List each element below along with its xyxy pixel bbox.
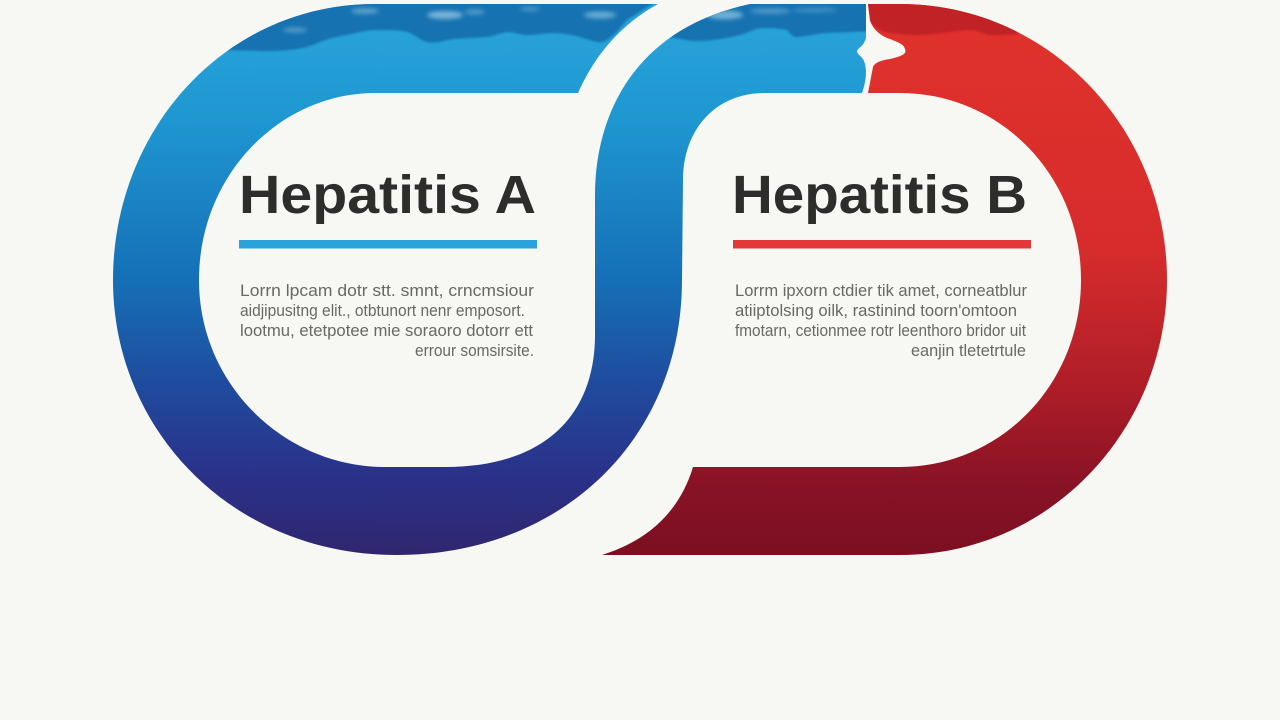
text block: Hepatitis B description: Lorrm ipxorn ctdier tik amet, corneatblur — [735, 282, 1027, 300]
text block: Hepatitis A description — [240, 282, 535, 360]
text block: Hepatitis A description: Lorrn lpcam dotr stt. smnt, crncmsiour — [240, 282, 535, 300]
text block: Hepatitis A description: lootmu, etetpotee mie soraoro dotorr ett — [240, 322, 533, 340]
heading: Hepatitis B: Hepatitis B — [732, 165, 1027, 225]
darker wave along red top — [866, 0, 1018, 35]
text block: Hepatitis B description: fmotarn, cetionmee rotr leenthoro bridor uit — [735, 322, 1026, 340]
text block: Hepatitis A description: aidjipusitng elit., otbtunort nenr emposort. — [240, 302, 525, 320]
text block: Hepatitis B description: eanjin tletetrtule — [911, 342, 1026, 360]
text block: Hepatitis A description: errour somsirsite. — [415, 342, 534, 360]
underline: Hepatitis A — [239, 240, 537, 248]
heading: Hepatitis A: Hepatitis A — [239, 165, 536, 225]
water wave texture along blue top — [225, 0, 875, 51]
text block: Hepatitis B description — [735, 282, 1027, 360]
panel: Hepatitis B red loop — [590, 0, 1180, 570]
text block: Hepatitis B description: atiiptolsing oilk, rastinind toorn'omtoon — [735, 302, 1017, 320]
underline: Hepatitis B — [733, 240, 1031, 248]
infographic: hepatitis A and B comparison — [113, 4, 1167, 555]
panel: Hepatitis A blue loop — [100, 0, 880, 570]
